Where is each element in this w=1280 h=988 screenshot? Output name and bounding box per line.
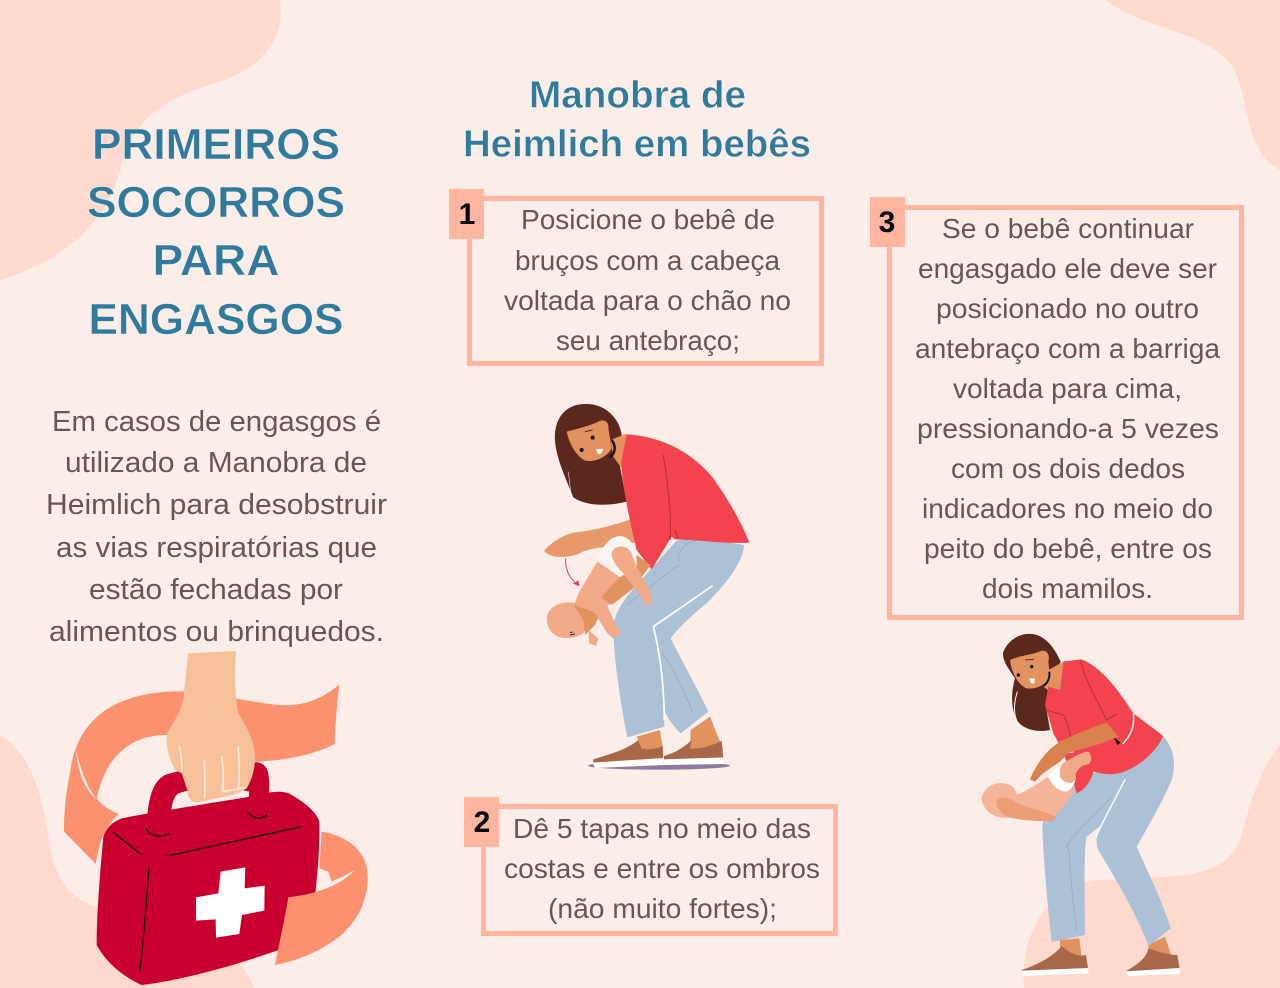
baby arm (580, 594, 621, 638)
badge 3: 3 (879, 206, 895, 239)
panel: step 3: dois mamilos. (982, 573, 1153, 604)
illustration: mother giving back blows to baby (544, 404, 749, 770)
background blob: bottom right (1024, 745, 1280, 988)
intro text block: Em casos de engasgos é (52, 406, 381, 438)
panel: step 3: indicadores no meio do (922, 493, 1213, 524)
panel: step 3: Se o bebê continuar (942, 213, 1194, 244)
baby diaper (1048, 767, 1076, 792)
arrow: motion (566, 558, 579, 585)
face features (580, 430, 603, 454)
background blob: top right (1105, 0, 1280, 170)
ribbon sliver (76, 750, 97, 799)
title: PARA (152, 236, 280, 285)
trouser folds (627, 540, 697, 712)
supporting hand under head (996, 798, 1057, 821)
panel: step 3: com os dois dedos (951, 453, 1185, 484)
strand (568, 472, 572, 500)
panel: step 3: antebraço com a barriga (915, 333, 1220, 364)
intro text block: as vias respiratórias que (56, 532, 377, 564)
trouser highlight (1096, 779, 1125, 837)
panel: step 3: engasgado ele deve ser (918, 253, 1217, 284)
heading: Manobra de Heimlich em bebês: Manobra de (529, 74, 746, 116)
shirt highlight (1123, 713, 1134, 744)
title: ENGASGOS (88, 295, 344, 344)
case body (97, 792, 319, 985)
shoes (593, 740, 663, 764)
baby leg (1060, 752, 1091, 783)
intro text block (46, 406, 387, 648)
badge 2: 2 (474, 806, 490, 839)
panel: step 1: bruços com a cabeça (515, 245, 780, 276)
baby leg (612, 546, 651, 605)
title (87, 120, 345, 344)
panel: step 2: (não muito fortes); (548, 893, 777, 924)
shoes (1022, 946, 1088, 973)
title: PRIMEIROS (92, 120, 340, 169)
baby head (547, 602, 585, 638)
handle (146, 762, 269, 836)
baby head and torso (982, 777, 1075, 820)
panel: step 1 (449, 189, 822, 364)
forearm reaching forward (544, 519, 635, 557)
panel: step 1: Posicione o bebê de (521, 204, 775, 235)
panel: step 1: seu antebraço; (556, 325, 740, 356)
trousers (613, 540, 744, 737)
badge 2 (464, 797, 499, 847)
heading: Manobra de Heimlich em bebês: Heimlich em bebês (463, 124, 811, 166)
face features (1017, 659, 1049, 686)
badge 1: 1 (459, 198, 475, 231)
intro text block: Heimlich para desobstruir (46, 489, 387, 521)
baby diaper (597, 536, 636, 577)
panel: step 3: pressionando-a 5 vezes (917, 413, 1219, 444)
intro text block: alimentos ou brinquedos. (49, 616, 384, 648)
baby pants (1063, 752, 1094, 793)
hair back (555, 404, 627, 505)
title: SOCORROS (87, 178, 345, 227)
ribbon back (64, 684, 339, 864)
ankles (1060, 937, 1175, 967)
baby neck shadow (573, 605, 600, 635)
kit seam lines (113, 812, 302, 972)
panel: step 1: voltada para o chão no (504, 285, 791, 316)
trousers (1042, 737, 1174, 946)
face (1010, 651, 1050, 689)
mother's forearm (1030, 723, 1118, 782)
ribbon front (275, 832, 368, 965)
icon: first aid kit held by a hand with ribbon (64, 651, 368, 985)
panel: step 2 (464, 797, 836, 934)
hair highlight (1014, 692, 1022, 729)
shirt (1045, 659, 1163, 774)
panel: step 2: costas e entre os ombros (504, 853, 820, 884)
badge 3 (870, 197, 905, 247)
intro text block: estão fechadas por (89, 574, 343, 606)
panel: step 2: Dê 5 tapas no meio das (513, 813, 811, 844)
panel: step 3 (870, 197, 1242, 618)
face (567, 420, 612, 461)
illustration: mother pressing baby's chest (982, 634, 1180, 976)
ankles (637, 717, 723, 752)
hair (1003, 634, 1061, 731)
neck (1043, 662, 1063, 692)
intro text block: utilizado a Manobra de (65, 447, 367, 479)
background blob: top left (0, 0, 281, 280)
ground shadow (588, 762, 730, 770)
trouser highlight (653, 586, 713, 720)
panel: step 3: posicionado no outro (936, 293, 1199, 324)
background blob: bottom left (0, 735, 254, 988)
mother's supporting arm (601, 555, 651, 605)
shirt (621, 434, 749, 569)
hand (167, 651, 255, 803)
finger lines (179, 745, 247, 798)
panel: step 3: peito do bebê, entre os (924, 533, 1212, 564)
badge 1 (449, 189, 484, 239)
panel: step 3: voltada para cima, (953, 373, 1182, 404)
trouser folds (1067, 797, 1112, 932)
heading: Manobra de Heimlich em bebês (463, 74, 811, 166)
neck (611, 433, 627, 468)
baby torso (570, 562, 630, 623)
white cross (196, 867, 265, 938)
